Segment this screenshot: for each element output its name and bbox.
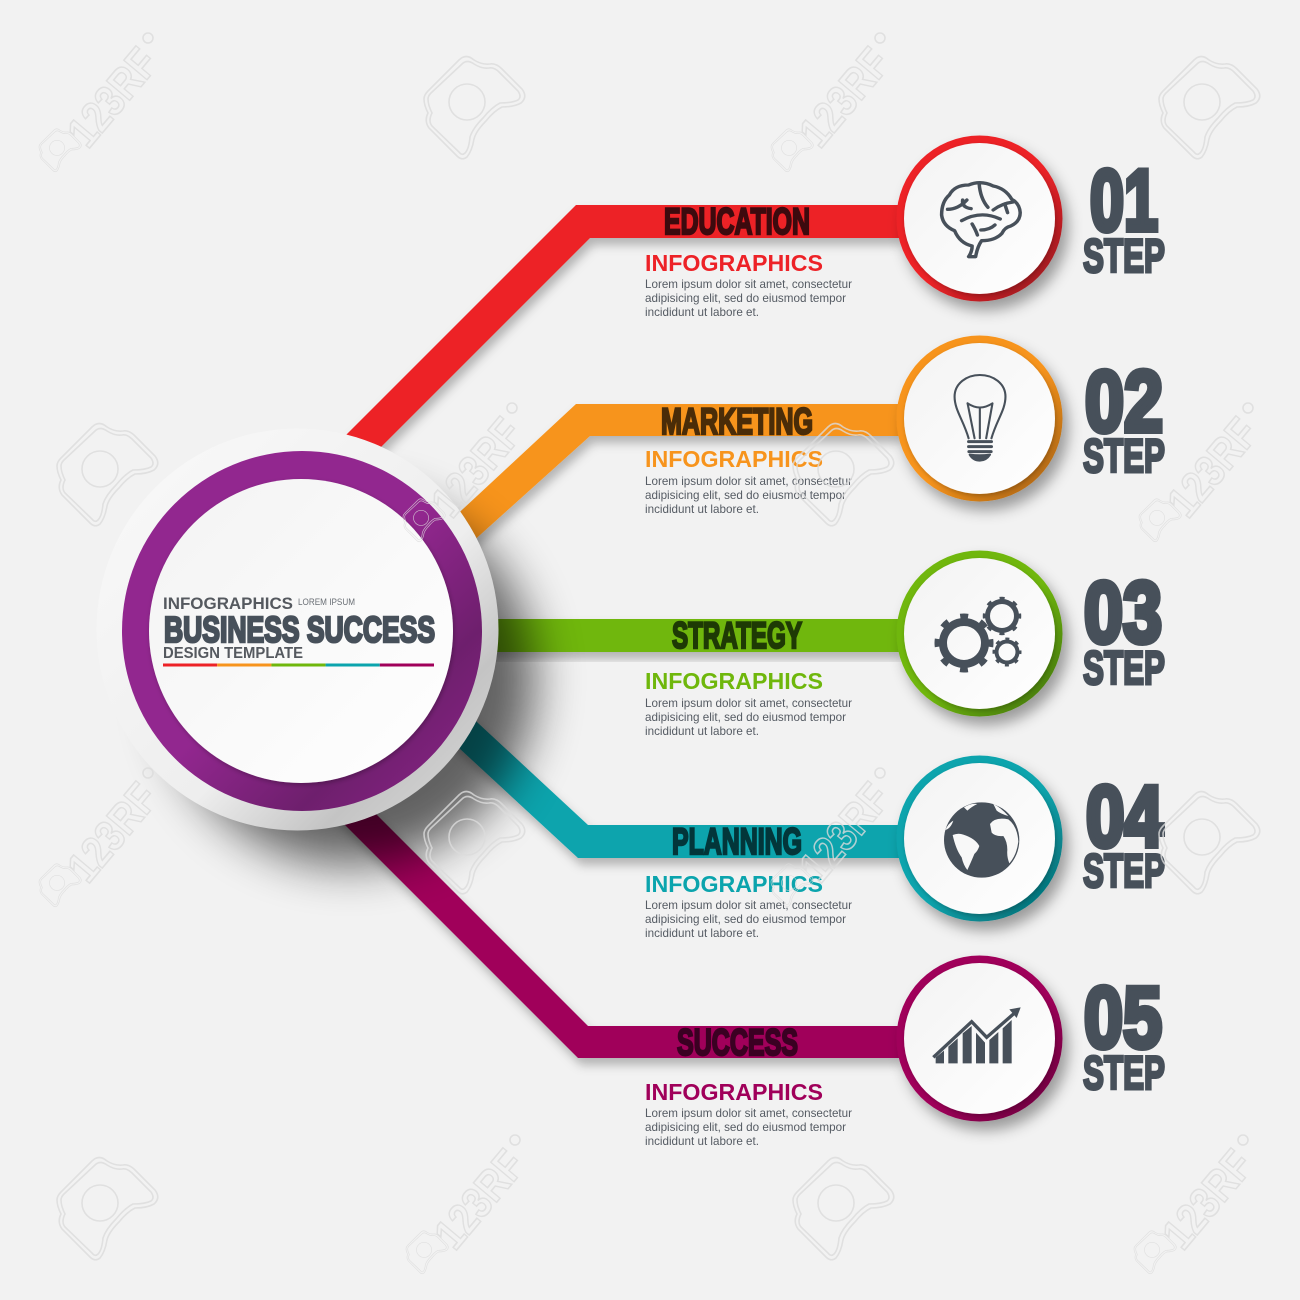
- body text: incididunt ut labore et.: [645, 502, 759, 516]
- watermarks: 123RF: [422, 409, 532, 526]
- hub title: [163, 594, 435, 662]
- body text: incididunt ut labore et.: [645, 724, 759, 738]
- panel: step 03 strategy: [300, 550, 1165, 738]
- step label: STEP: [1083, 844, 1165, 897]
- body text: adipisicing elit, sed do eiusmod tempor: [645, 488, 846, 502]
- body text: incididunt ut labore et.: [645, 1134, 759, 1148]
- hub title: DESIGN TEMPLATE: [163, 645, 303, 662]
- connector: orange: [350, 404, 900, 652]
- heading: success: SUCCESS: [677, 1021, 798, 1063]
- body text: adipisicing elit, sed do eiusmod tempor: [645, 291, 846, 305]
- panel: step 01 education: [300, 136, 1165, 528]
- icon: growth chart: [933, 1007, 1021, 1063]
- hub title: BUSINESS SUCCESS: [164, 609, 435, 650]
- step label: STEP: [1083, 641, 1165, 694]
- step number 01: 01: [1090, 153, 1158, 249]
- watermarks: 123RF: [790, 774, 900, 891]
- icon: light bulb: [955, 375, 1005, 461]
- body text: incididunt ut labore et.: [645, 926, 759, 940]
- panel: step 04 planning: [340, 595, 1165, 940]
- panel: central hub: [96, 428, 535, 865]
- hub purple ring: [122, 451, 482, 811]
- connector: green: [300, 619, 900, 652]
- subheading: INFOGRAPHICS: [645, 1079, 823, 1105]
- watermarks: 123RF: [58, 774, 168, 891]
- heading: strategy: STRATEGY: [672, 614, 802, 656]
- watermarks: 123RF: [1158, 409, 1268, 526]
- watermarks: 123RF: [790, 39, 900, 156]
- heading: planning: PLANNING: [672, 820, 802, 862]
- connector: teal: [340, 595, 900, 858]
- body text: [645, 1106, 852, 1148]
- body text: [645, 898, 852, 940]
- body text: [645, 277, 852, 319]
- body text: Lorem ipsum dolor sit amet, consectetur: [645, 898, 852, 912]
- step label: STEP: [1083, 1046, 1165, 1099]
- panel: step 05 success: [300, 738, 1165, 1148]
- hub outer disc: [96, 428, 498, 830]
- step circle: [896, 136, 1062, 302]
- body text: incididunt ut labore et.: [645, 305, 759, 319]
- connector: magenta: [300, 738, 900, 1058]
- step label: STEP: [1083, 229, 1165, 282]
- body text: adipisicing elit, sed do eiusmod tempor: [645, 710, 846, 724]
- body text: [645, 696, 852, 738]
- hub shadow: [165, 495, 535, 865]
- step circle: [896, 756, 1062, 922]
- icon: gears: [937, 598, 1020, 670]
- watermarks: 123RF: [425, 1141, 535, 1258]
- subheading: INFOGRAPHICS: [645, 446, 823, 472]
- step circle: [896, 550, 1062, 716]
- body text: Lorem ipsum dolor sit amet, consectetur: [645, 1106, 852, 1120]
- body text: adipisicing elit, sed do eiusmod tempor: [645, 912, 846, 926]
- step circle: [896, 956, 1062, 1122]
- step number 02: 02: [1085, 354, 1163, 450]
- step label: STEP: [1083, 429, 1165, 482]
- subheading: INFOGRAPHICS: [645, 871, 823, 897]
- step number 03: 03: [1084, 565, 1162, 661]
- step circle: [896, 336, 1062, 502]
- hub title: INFOGRAPHICS: [163, 594, 293, 613]
- subheading: INFOGRAPHICS: [645, 250, 823, 276]
- hub rainbow rule: [163, 664, 434, 666]
- body text: adipisicing elit, sed do eiusmod tempor: [645, 1120, 846, 1134]
- heading: education: EDUCATION: [664, 200, 810, 242]
- body text: Lorem ipsum dolor sit amet, consectetur: [645, 474, 852, 488]
- step number 05: 05: [1084, 970, 1162, 1066]
- step number 04: 04: [1086, 769, 1163, 865]
- body text: [645, 474, 852, 516]
- watermarks: 123RF: [58, 39, 168, 156]
- body text: Lorem ipsum dolor sit amet, consectetur: [645, 277, 852, 291]
- subheading: INFOGRAPHICS: [645, 668, 823, 694]
- icon: globe: [944, 802, 1019, 878]
- heading: marketing: MARKETING: [661, 400, 813, 442]
- connector: red: [300, 205, 900, 528]
- watermarks: 123RF: [1153, 1141, 1263, 1258]
- hub white face: [149, 479, 453, 783]
- body text: Lorem ipsum dolor sit amet, consectetur: [645, 696, 852, 710]
- hub title: LOREM IPSUM: [298, 597, 355, 607]
- icon: brain: [942, 183, 1020, 257]
- panel: step 02 marketing: [350, 336, 1165, 652]
